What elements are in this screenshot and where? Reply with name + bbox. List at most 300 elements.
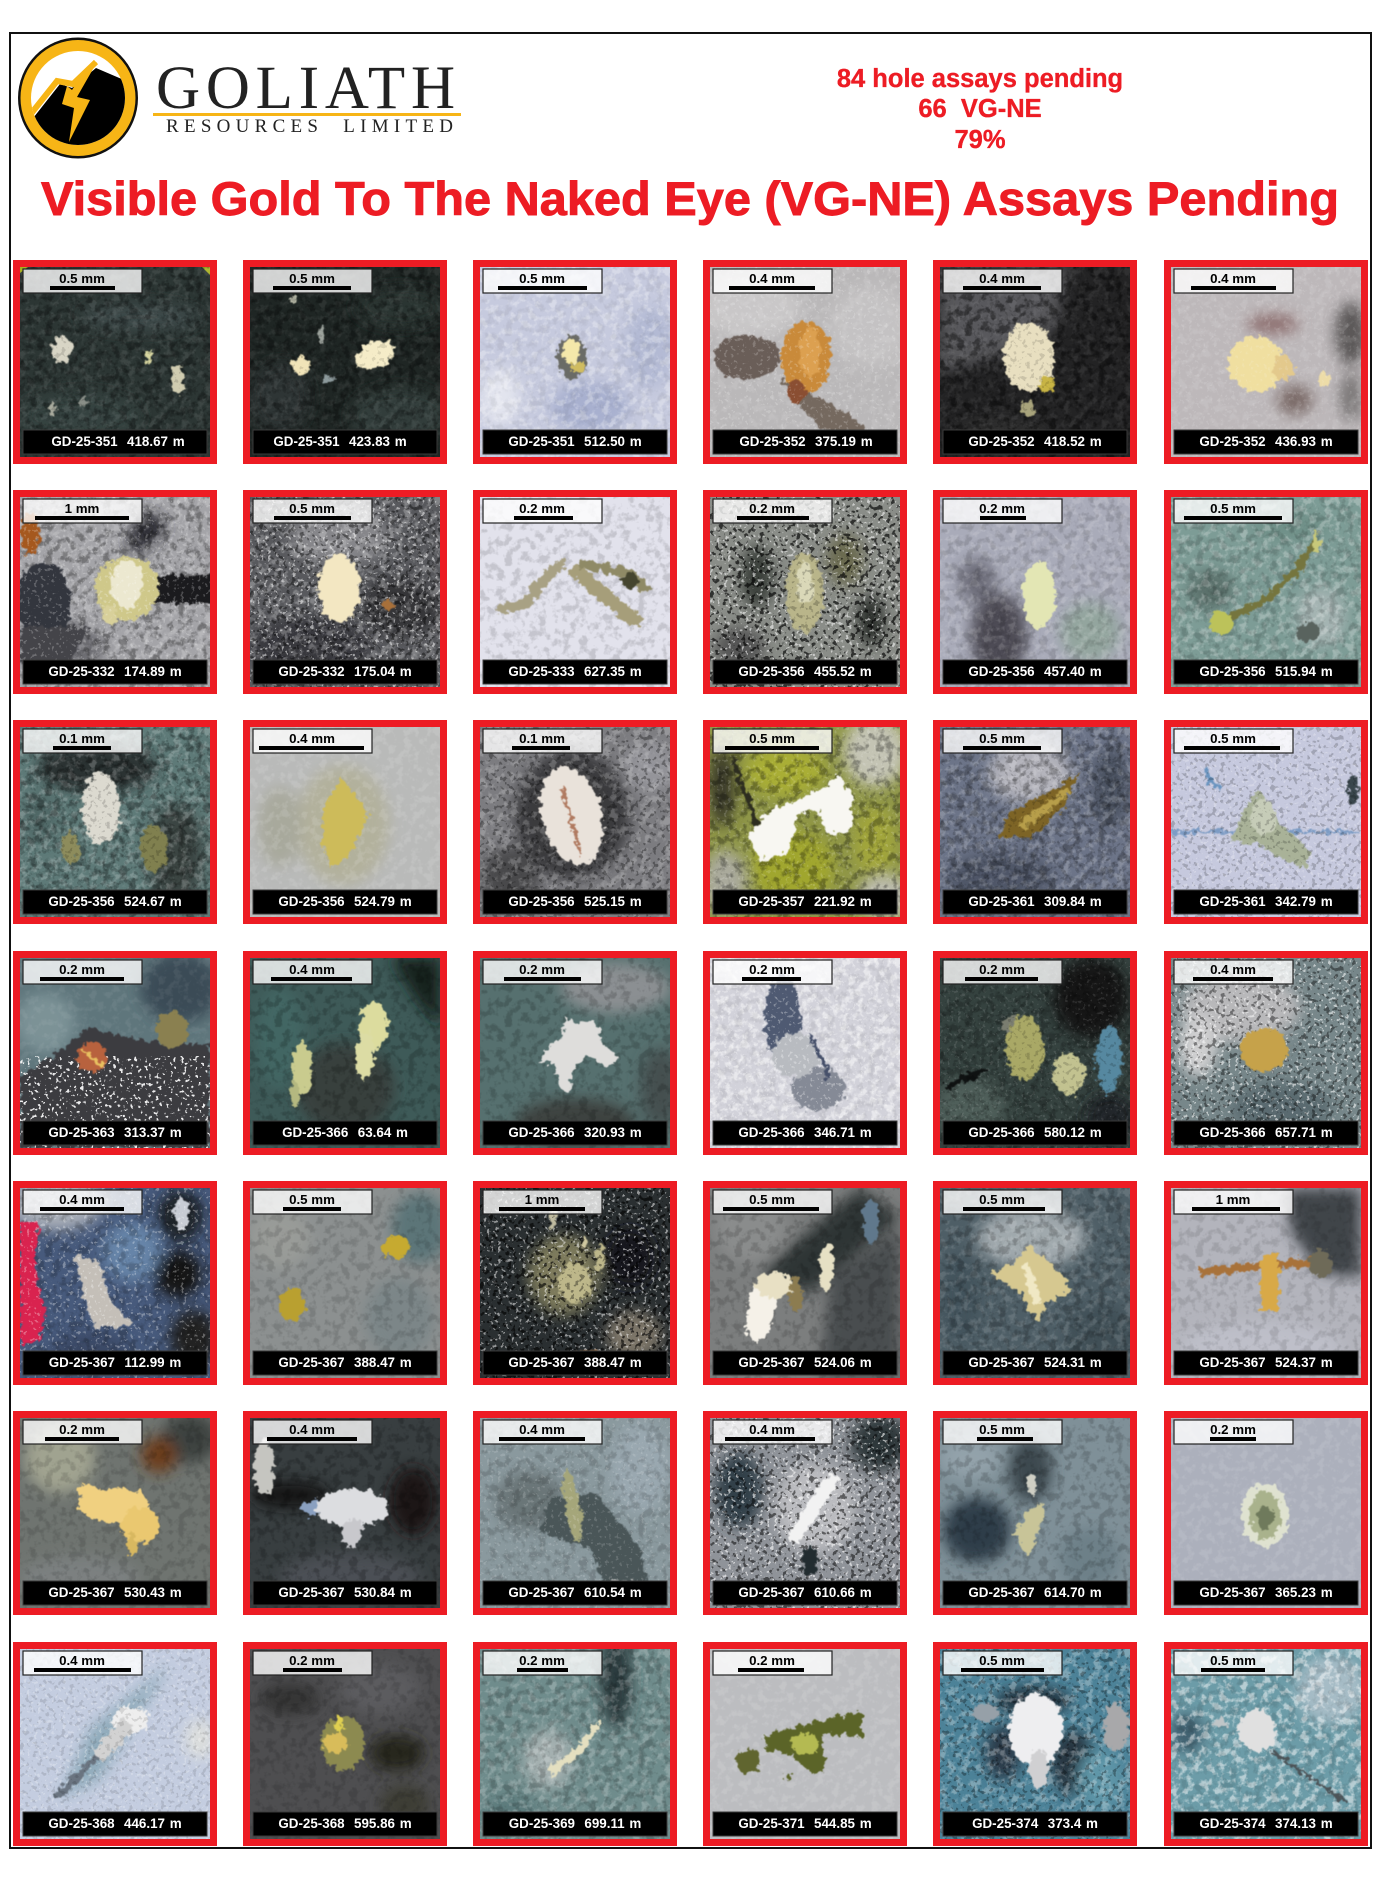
sample label: GD-25-356 525.15 m — [508, 894, 642, 909]
card: GD-25-363 313.37 m — [13, 951, 220, 1246]
card: GD-25-366 657.71 m — [1164, 951, 1368, 1155]
sample label — [713, 1812, 897, 1836]
sample label: GD-25-351 418.67 m — [51, 434, 185, 449]
logo: Goliath Resources — [18, 38, 461, 160]
photo — [20, 1649, 210, 1839]
sample label: GD-25-356 524.67 m — [48, 894, 182, 909]
sample label: GD-25-363 313.37 m — [48, 1125, 182, 1140]
sample label: GD-25-367 388.47 m — [508, 1355, 642, 1370]
sample label — [253, 1812, 437, 1836]
scale bar: 0.5 mm — [519, 271, 565, 286]
photo — [20, 727, 210, 917]
sample label — [23, 660, 207, 684]
title: Visible Gold To The Naked Eye (VG-NE) Assays Pending — [41, 172, 1339, 225]
scale bar: 0.5 mm — [1210, 501, 1256, 516]
sample label: GD-25-374 374.13 m — [1199, 1816, 1333, 1831]
sample label: GD-25-366 63.64 m — [282, 1125, 408, 1140]
white gold grains — [732, 757, 852, 861]
card: GD-25-356 457.40 m — [933, 490, 1137, 694]
photo — [480, 1418, 670, 1608]
card: GD-25-361 309.84 m — [933, 720, 1137, 924]
sample label — [253, 890, 437, 914]
sample label — [943, 1581, 1127, 1605]
gold grain — [1241, 1483, 1289, 1547]
scale bar: 0.5 mm — [979, 1422, 1025, 1437]
photo — [940, 1649, 1130, 1839]
scale bar: 0.4 mm — [289, 1422, 335, 1437]
sample label — [943, 1812, 1127, 1836]
scale bar — [23, 1651, 142, 1675]
scale bar — [23, 269, 142, 293]
gold grain — [1198, 1249, 1333, 1310]
photo — [940, 727, 1130, 917]
gold grain — [786, 553, 824, 633]
white gold grains — [972, 1693, 1129, 1789]
scale bar — [713, 1420, 832, 1444]
card: GD-25-366 580.12 m — [933, 951, 1137, 1155]
scale bar: 0.5 mm — [749, 1192, 795, 1207]
scale bar: 0.2 mm — [979, 962, 1025, 977]
scale bar — [1174, 1190, 1293, 1214]
photo — [250, 497, 440, 687]
sample label — [253, 430, 437, 454]
scale bar: 0.1 mm — [519, 731, 565, 746]
gold grains — [1228, 336, 1329, 392]
sample label — [713, 660, 897, 684]
card: GD-25-367 530.43 m — [13, 1411, 218, 1615]
card: GD-25-368 595.86 m — [243, 1642, 447, 1846]
gold vein — [1209, 533, 1320, 642]
photo — [480, 1649, 670, 1839]
gold grain and host rock — [714, 321, 875, 442]
sample label: GD-25-367 388.47 m — [278, 1355, 412, 1370]
scale bar: 0.5 mm — [979, 1653, 1025, 1668]
card: GD-25-367 112.99 m — [5, 1175, 218, 1385]
photo — [710, 727, 900, 917]
photo — [710, 1418, 900, 1608]
scale bar — [23, 499, 142, 523]
assay stats — [837, 65, 1123, 154]
sample label: GD-25-351 512.50 m — [508, 434, 642, 449]
scale bar — [713, 729, 832, 753]
sample label — [483, 1581, 667, 1605]
scale bar — [943, 1420, 1062, 1444]
photo — [20, 1188, 210, 1378]
sample label — [253, 1351, 437, 1375]
card: GD-25-374 373.4 m — [933, 1642, 1137, 1846]
sample label: GD-25-366 580.12 m — [968, 1125, 1102, 1140]
card: GD-25-352 436.93 m — [1164, 260, 1368, 464]
card: GD-25-367 365.23 m — [1164, 1411, 1368, 1615]
scale bar — [23, 1420, 142, 1444]
gold grain — [1003, 323, 1056, 417]
photo — [480, 1188, 670, 1378]
gold grain — [1240, 1028, 1288, 1072]
sample label — [943, 1121, 1127, 1145]
scale bar — [253, 960, 372, 984]
scale bar — [1174, 729, 1293, 753]
scale bar: 0.2 mm — [1210, 1422, 1256, 1437]
sample label: GD-25-352 436.93 m — [1199, 434, 1333, 449]
scale bar — [713, 499, 832, 523]
gold grain — [318, 554, 393, 622]
sample label — [483, 1351, 667, 1375]
photo — [940, 1188, 1130, 1378]
scale bar: 0.4 mm — [289, 962, 335, 977]
card: GD-25-366 320.93 m — [473, 951, 680, 1155]
card: GD-25-361 342.79 m — [1164, 720, 1368, 924]
scale bar: 0.4 mm — [749, 1422, 795, 1437]
photo — [940, 958, 1130, 1148]
scale bar — [1174, 1651, 1293, 1675]
sample label — [23, 890, 207, 914]
sample label: GD-25-333 627.35 m — [508, 664, 642, 679]
sample label — [943, 1351, 1127, 1375]
card: GD-25-368 446.17 m — [13, 1642, 217, 1846]
photo — [480, 727, 670, 917]
gold grains — [736, 1711, 862, 1781]
gold grain — [557, 335, 587, 379]
gold grain and dark minerals — [17, 511, 215, 662]
gold grain — [999, 773, 1078, 837]
scale bar — [253, 729, 372, 753]
scale bar: 0.2 mm — [59, 962, 105, 977]
gold grain — [321, 1716, 365, 1770]
assay stats: 84 hole assays pending — [837, 65, 1123, 93]
sample label — [253, 1121, 437, 1145]
card: GD-25-367 610.66 m — [703, 1411, 910, 1615]
wordmark: GOLIATH — [156, 55, 455, 122]
scale bar — [253, 1420, 372, 1444]
sample label: GD-25-356 524.79 m — [278, 894, 412, 909]
scale bar: 1 mm — [1216, 1192, 1250, 1207]
sample label: GD-25-367 610.66 m — [738, 1585, 872, 1600]
card: GD-25-352 375.19 m — [700, 260, 910, 464]
sample label: GD-25-371 544.85 m — [738, 1816, 872, 1831]
card: GD-25-371 544.85 m — [703, 1642, 907, 1846]
scale bar — [943, 1651, 1062, 1675]
scale bar — [23, 1190, 142, 1214]
sample label — [1174, 890, 1358, 914]
photo — [710, 1649, 900, 1839]
sample label: GD-25-367 524.37 m — [1199, 1355, 1333, 1370]
photo — [940, 1418, 1130, 1608]
photo — [250, 958, 440, 1148]
scale bar — [943, 269, 1062, 293]
scale bar — [483, 1190, 602, 1214]
sample label — [1174, 1581, 1358, 1605]
sample label: GD-25-366 657.71 m — [1199, 1125, 1333, 1140]
photo — [1170, 1649, 1366, 1839]
photo — [1171, 1418, 1361, 1608]
sample label — [483, 1812, 667, 1836]
scale bar: 1 mm — [525, 1192, 559, 1207]
photo — [710, 1188, 900, 1378]
scale bar: 1 mm — [65, 501, 99, 516]
scale bar — [483, 1420, 602, 1444]
gold grain — [57, 1706, 149, 1797]
sample label: GD-25-367 524.06 m — [738, 1355, 872, 1370]
photo — [1171, 1188, 1361, 1378]
photo — [710, 267, 900, 457]
card: GD-25-356 524.67 m — [13, 720, 217, 924]
card: GD-25-369 699.11 m — [473, 1629, 677, 1846]
sample label — [943, 430, 1127, 454]
scale bar — [483, 269, 602, 293]
scale bar: 0.5 mm — [289, 1192, 335, 1207]
scale bar: 0.2 mm — [519, 962, 565, 977]
scale bar: 0.5 mm — [979, 731, 1025, 746]
sample label: GD-25-368 446.17 m — [48, 1816, 182, 1831]
scale bar: 0.5 mm — [749, 731, 795, 746]
sample label: GD-25-356 515.94 m — [1199, 664, 1333, 679]
gold grain — [322, 778, 368, 867]
sample label: GD-25-332 174.89 m — [48, 664, 182, 679]
sample label — [943, 890, 1127, 914]
card: GD-25-356 455.52 m — [703, 490, 907, 694]
card: GD-25-367 524.31 m — [933, 1181, 1137, 1385]
photo — [20, 497, 210, 687]
card: GD-25-333 627.35 m — [473, 490, 677, 694]
photo — [1171, 727, 1361, 917]
photo — [1171, 958, 1361, 1148]
gold grains — [945, 1015, 1122, 1095]
tagline: RESOURCES LIMITED — [166, 116, 453, 137]
sample label — [1174, 430, 1358, 454]
gold grains — [291, 1001, 388, 1108]
scale bar: 0.2 mm — [59, 1422, 105, 1437]
dark vein and grain — [765, 975, 844, 1111]
photo — [250, 1188, 440, 1378]
scale bar — [943, 729, 1062, 753]
scale bar — [253, 1190, 372, 1214]
scale bar — [483, 729, 602, 753]
gold grains — [501, 565, 645, 620]
photo — [20, 958, 210, 1148]
sample label: GD-25-367 112.99 m — [49, 1355, 181, 1370]
sample label — [253, 1581, 437, 1605]
sample label: GD-25-332 175.04 m — [278, 664, 412, 679]
scale bar — [1174, 269, 1293, 293]
sample label: GD-25-361 342.79 m — [1199, 894, 1333, 909]
scale bar: 0.4 mm — [59, 1192, 105, 1207]
sample label — [1174, 660, 1358, 684]
gold grain — [990, 1246, 1070, 1323]
scale bar: 0.1 mm — [59, 731, 105, 746]
scale bar — [483, 499, 602, 523]
photo — [710, 958, 900, 1148]
card: GD-25-352 418.52 m — [933, 260, 1137, 464]
scale bar — [1174, 499, 1293, 523]
sample label — [483, 430, 667, 454]
scale bar: 0.5 mm — [289, 501, 335, 516]
sample label: GD-25-369 699.11 m — [509, 1816, 641, 1831]
gold grains — [49, 335, 184, 415]
sample label — [1174, 1812, 1358, 1836]
card: GD-25-367 530.84 m — [243, 1411, 447, 1615]
granular dark host rock — [20, 1028, 210, 1148]
card: GD-25-351 423.83 m — [243, 260, 450, 464]
sample label — [483, 660, 667, 684]
sample label: GD-25-352 418.52 m — [968, 434, 1102, 449]
sample label: GD-25-367 610.54 m — [508, 1585, 642, 1600]
card: GD-25-366 63.64 m — [243, 951, 447, 1155]
card: GD-25-351 418.67 m — [13, 260, 217, 464]
scale bar: 0.2 mm — [519, 501, 565, 516]
sample label: GD-25-367 614.70 m — [968, 1585, 1102, 1600]
photo — [20, 267, 210, 457]
card: GD-25-332 174.89 m — [13, 490, 217, 694]
scale bar: 0.2 mm — [289, 1653, 335, 1668]
scale bar — [713, 1190, 832, 1214]
scale bar: 0.5 mm — [289, 271, 335, 286]
card: GD-25-351 512.50 m — [473, 260, 677, 464]
sample label: GD-25-367 530.43 m — [48, 1585, 182, 1600]
scale bar — [943, 960, 1062, 984]
gold vein — [550, 1724, 598, 1772]
scale bar: 0.2 mm — [749, 1653, 795, 1668]
card: GD-25-367 614.70 m — [933, 1411, 1137, 1615]
card: GD-25-367 388.47 m — [243, 1181, 448, 1385]
scale bar: 0.4 mm — [59, 1653, 105, 1668]
scale bar: 0.4 mm — [1210, 271, 1256, 286]
scale bar — [1174, 1420, 1293, 1444]
photo — [710, 497, 900, 687]
scale bar — [23, 960, 142, 984]
sample label — [23, 1121, 207, 1145]
scale bar — [713, 269, 832, 293]
sample label: GD-25-374 373.4 m — [972, 1816, 1098, 1831]
photo — [250, 1418, 440, 1608]
card: GD-25-356 525.15 m — [473, 720, 677, 924]
red mineral and pale gold — [20, 1197, 189, 1343]
sample label: GD-25-361 309.84 m — [968, 894, 1102, 909]
scale bar — [483, 1651, 602, 1675]
card: GD-25-356 515.94 m — [1164, 490, 1368, 694]
gold grains — [1015, 1475, 1043, 1558]
scale bar — [713, 1651, 832, 1675]
scale bar — [1174, 960, 1293, 984]
scale bar: 0.5 mm — [1210, 1653, 1256, 1668]
sample label: GD-25-366 320.93 m — [508, 1125, 642, 1140]
scale bar — [713, 960, 832, 984]
scale bar: 0.4 mm — [289, 731, 335, 746]
scale bar: 0.5 mm — [59, 271, 105, 286]
assay stats: 79% — [954, 126, 1006, 154]
sample label: GD-25-368 595.86 m — [278, 1816, 412, 1831]
sample label — [23, 430, 207, 454]
white quartz streak — [792, 1476, 835, 1575]
scale bar — [253, 1651, 372, 1675]
sample label: GD-25-367 530.84 m — [278, 1585, 412, 1600]
sample label: GD-25-367 524.31 m — [968, 1355, 1102, 1370]
photo — [940, 497, 1130, 687]
sample label — [713, 890, 897, 914]
sample label: GD-25-351 423.83 m — [273, 434, 407, 449]
sample label: GD-25-352 375.19 m — [739, 434, 873, 449]
photo — [480, 497, 670, 687]
scale bar — [943, 499, 1062, 523]
scale bar: 0.4 mm — [749, 271, 795, 286]
scale bar — [943, 1190, 1062, 1214]
sample label — [483, 890, 667, 914]
dark rock and gold grain — [540, 1466, 650, 1600]
card: GD-25-367 388.47 m (second) — [473, 1181, 677, 1385]
gold grains — [61, 772, 167, 872]
sample label — [713, 1351, 897, 1375]
scale bar — [483, 960, 602, 984]
sample label — [23, 1812, 207, 1836]
card: GD-25-332 175.04 m — [243, 490, 447, 694]
assay stats: 66 VG-NE — [918, 95, 1042, 123]
scale bar: 0.4 mm — [979, 271, 1025, 286]
scale bar: 0.5 mm — [1210, 731, 1256, 746]
photo — [940, 267, 1130, 457]
sample label: GD-25-357 221.92 m — [738, 894, 872, 909]
white gold grain and vein — [1212, 1709, 1347, 1803]
gold grain — [1022, 561, 1056, 629]
photo — [250, 267, 440, 457]
photo — [250, 1649, 440, 1839]
card: GD-25-367 524.37 m — [1164, 1181, 1368, 1385]
scale bar: 0.4 mm — [1210, 962, 1256, 977]
sample label — [713, 430, 897, 454]
sample label: GD-25-356 455.52 m — [738, 664, 872, 679]
sample label — [713, 1581, 897, 1605]
white gold grain — [254, 1440, 388, 1548]
sample label — [943, 660, 1127, 684]
sample label: GD-25-367 365.23 m — [1199, 1585, 1333, 1600]
scale bar: 0.4 mm — [519, 1422, 565, 1437]
sample label — [1174, 1121, 1358, 1145]
sample label — [483, 1121, 667, 1145]
photo — [480, 958, 670, 1148]
scale bar: 0.2 mm — [749, 962, 795, 977]
scale bar: 0.2 mm — [979, 501, 1025, 516]
card: GD-25-366 346.71 m — [703, 951, 907, 1155]
sample label — [1174, 1351, 1358, 1375]
gold grain — [78, 1483, 160, 1558]
scale bar — [253, 499, 372, 523]
card: GD-25-367 524.06 m — [703, 1181, 907, 1385]
gold grains — [77, 1012, 188, 1072]
sample label: GD-25-366 346.71 m — [738, 1125, 872, 1140]
white gold grain — [538, 1018, 620, 1093]
sample label — [23, 1581, 207, 1605]
sample label — [253, 660, 437, 684]
photo — [250, 727, 440, 917]
card: GD-25-367 610.54 m — [473, 1411, 677, 1615]
scale bar: 0.5 mm — [979, 1192, 1025, 1207]
gold grains — [549, 1208, 605, 1366]
photo — [480, 267, 670, 457]
gold grain and blue veins — [1171, 767, 1361, 867]
scale bar: 0.2 mm — [519, 1653, 565, 1668]
gold grains — [291, 296, 400, 382]
card: GD-25-374 374.13 m — [1164, 1642, 1368, 1846]
gold grain — [530, 760, 614, 872]
scale bar — [23, 729, 142, 753]
gold grains — [741, 1200, 879, 1344]
sample label: GD-25-356 457.40 m — [968, 664, 1102, 679]
card: GD-25-356 524.79 m — [243, 720, 447, 924]
photo — [1171, 497, 1361, 687]
scale bar — [253, 269, 372, 293]
gold grains — [279, 1236, 410, 1322]
scale bar: 0.2 mm — [749, 501, 795, 516]
sample label — [23, 1351, 207, 1375]
photo — [1171, 267, 1361, 457]
